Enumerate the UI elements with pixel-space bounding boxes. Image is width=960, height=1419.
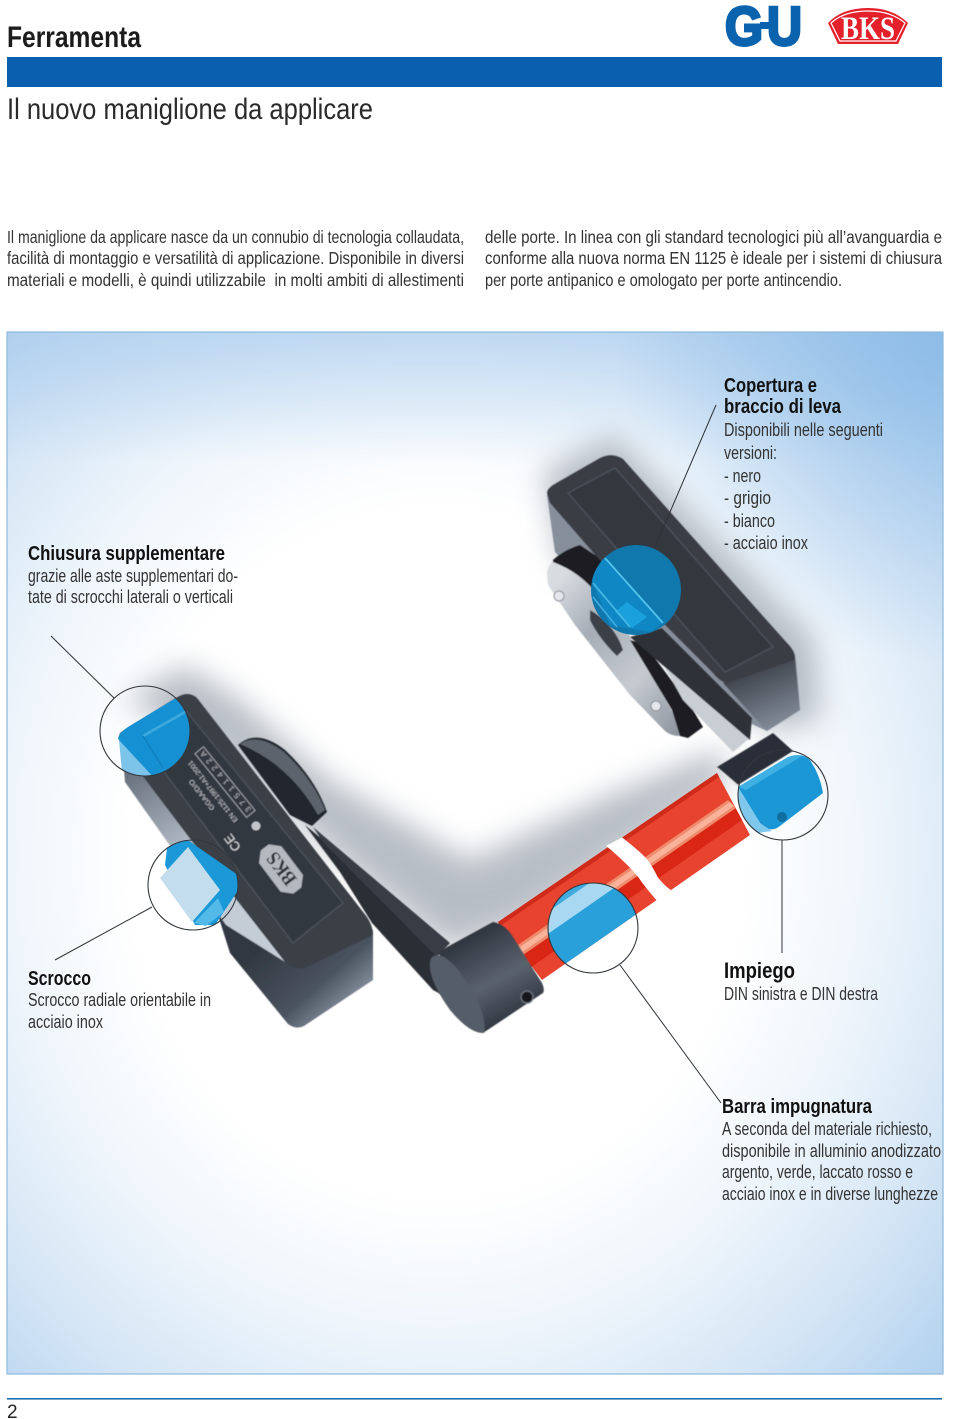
- label: Copertura e braccio di leva: Copertura e: [724, 375, 817, 397]
- model code: GGAA/D/O: [188, 777, 217, 811]
- mount: housing side: [547, 470, 800, 731]
- CE mark: CE: [221, 831, 244, 854]
- handle: red bar with break: [498, 773, 750, 980]
- label: Copertura e braccio di leva: Disponibili nelle seguenti: [724, 420, 883, 440]
- mount: chrome plate: [547, 547, 680, 736]
- lever arm: [305, 825, 470, 1010]
- BKS plate: [254, 839, 308, 899]
- label: Barra impugnatura: [722, 1096, 941, 1204]
- header blue bar: [7, 57, 942, 87]
- standard reference: EN 1125:1997+A1:2001: [187, 759, 240, 823]
- intro text: right column: [485, 227, 942, 290]
- label: Chiusura supplementare: grazie alle aste supplementari do-: [28, 566, 238, 586]
- label: Scrocco: Scrocco: [28, 968, 91, 990]
- blue lens: bar: [548, 884, 636, 964]
- label: Copertura e braccio di leva: - bianco: [724, 511, 775, 531]
- label: Impiego: DIN sinistra e DIN destra: [724, 984, 879, 1004]
- logo: G-U: [725, 0, 802, 57]
- label: Barra impugnatura: Barra impugnatura: [722, 1096, 873, 1118]
- label: Chiusura supplementare: tate di scrocchi laterali o verticali: [28, 587, 233, 607]
- label: Copertura e braccio di leva: - nero: [724, 466, 761, 486]
- intro text: left column: Il maniglione da applicare nasce da un connubio di tecnologia collaudata,: [7, 227, 464, 247]
- handle: upper hub: [717, 733, 793, 790]
- mount: housing top face: [547, 455, 795, 683]
- mount: dark lobe: [630, 640, 703, 738]
- label: Scrocco: acciaio inox: [28, 1012, 103, 1032]
- lock: upper side: [122, 745, 290, 965]
- lock: top face: [119, 694, 373, 968]
- logo: BKS: BKS: [841, 11, 895, 47]
- intro text: left column: facilità di montaggio e versatilità di applicazione. Disponibile in diversi: [7, 248, 464, 268]
- intro text: left column: materiali e modelli, è quindi utilizzabile in molti ambiti di allestimenti: [7, 270, 464, 290]
- label: Impiego: [724, 958, 879, 1004]
- rating label on lock plate: 3 7 5 1 1 4 2 2 A: [198, 749, 253, 814]
- blue lens: top cap of lock: [118, 698, 190, 776]
- mount: disc rim: [553, 545, 610, 595]
- label: Impiego: Impiego: [724, 958, 795, 983]
- label: Copertura e braccio di leva: - grigio: [724, 488, 771, 508]
- blue lens: hub: [735, 755, 823, 834]
- mount: lever arm: [630, 628, 752, 740]
- label: Copertura e braccio di leva: [724, 375, 883, 553]
- leader lines: [51, 405, 782, 1103]
- footer rule: [7, 1398, 942, 1400]
- label: Scrocco: Scrocco radiale orientabile in: [28, 990, 211, 1010]
- handle: upper mount: [547, 455, 800, 752]
- panel: product illustration: [7, 332, 943, 1374]
- subtitle: Il nuovo maniglione da applicare: [7, 93, 373, 126]
- blue lens: cover and lever: [591, 545, 681, 635]
- label: Copertura e braccio di leva: versioni:: [724, 443, 777, 463]
- lever knob: [238, 738, 327, 826]
- lock: lower side: [218, 915, 373, 1028]
- handle: lower lock body: [119, 694, 470, 1028]
- label: Copertura e braccio di leva: braccio di leva: [724, 396, 842, 418]
- BKS plate: BKS: [262, 847, 301, 889]
- intro text: right column: per porte antipanico e omologato per porte antincendio.: [485, 270, 842, 290]
- mount: chrome strip: [655, 650, 750, 752]
- label: Chiusura supplementare: [28, 543, 238, 607]
- callout rings: [100, 686, 828, 973]
- handle: lower hub: [430, 922, 544, 1033]
- title: Ferramenta: Ferramenta: [7, 21, 141, 54]
- label: Chiusura supplementare: Chiusura supplementare: [28, 543, 225, 565]
- intro text: left column: [7, 227, 464, 290]
- label: Copertura e braccio di leva: - acciaio inox: [724, 533, 808, 553]
- mount: knob recess: [590, 610, 623, 656]
- certification mark: [252, 822, 260, 830]
- label: Scrocco: [28, 968, 211, 1032]
- drop shadows: [125, 435, 820, 950]
- blue lens: latch: [160, 840, 238, 926]
